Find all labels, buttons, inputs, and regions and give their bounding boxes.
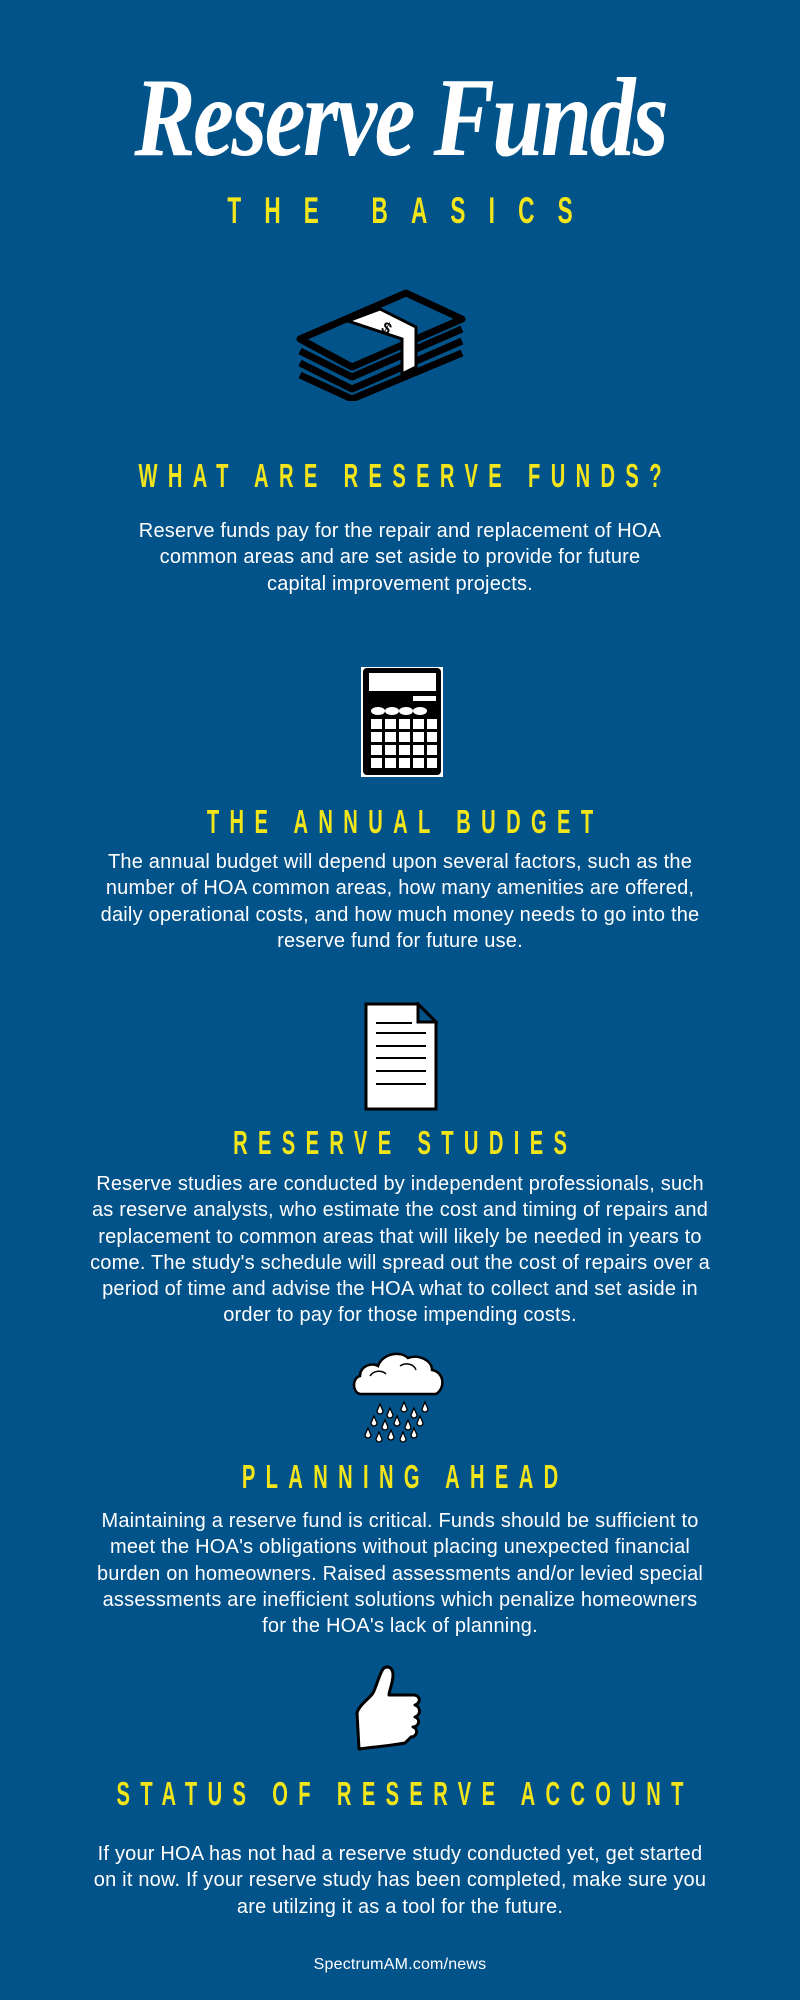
text: reserve studies: period of time and advise the HOA what to collect and set aside in	[102, 1278, 698, 1300]
footer: SpectrumAM.com/news	[314, 1956, 486, 1973]
heading: status of reserve account: STATUS OF RESERVE ACCOUNT	[117, 1775, 694, 1812]
text: planning ahead: burden on homeowners. Raised assessments and/or levied special	[97, 1563, 703, 1585]
icon: calculator	[361, 667, 443, 777]
text: annual budget	[101, 851, 699, 952]
heading: planning ahead: PLANNING AHEAD	[242, 1458, 569, 1495]
text: reserve studies: Reserve studies are conducted by independent professionals, such	[96, 1173, 704, 1195]
text: status of reserve account: are utilzing it as a tool for the future.	[237, 1896, 563, 1918]
text: annual budget: number of HOA common areas, how many amenities are offered,	[106, 877, 694, 899]
heading: the annual budget: THE ANNUAL BUDGET	[207, 803, 603, 840]
title: Reserve Funds	[134, 56, 666, 180]
text: planning ahead	[97, 1510, 703, 1637]
text: annual budget: The annual budget will depend upon several factors, such as the	[108, 851, 692, 873]
icon: rain cloud	[352, 1352, 444, 1443]
icon: thumbs up	[356, 1665, 421, 1750]
heading: reserve studies: RESERVE STUDIES	[233, 1124, 577, 1161]
text: reserve studies: as reserve analysts, who estimate the cost and timing of repairs and	[92, 1199, 708, 1221]
text: annual budget: reserve fund for future use.	[277, 930, 523, 952]
text: what are reserve funds: capital improvement projects.	[267, 573, 533, 595]
heading: what are reserve funds: WHAT ARE RESERVE FUNDS?	[138, 457, 672, 494]
text: planning ahead: Maintaining a reserve fund is critical. Funds should be sufficient to	[101, 1510, 699, 1532]
text: reserve studies: replacement to common areas that will likely be needed in years to	[98, 1226, 702, 1248]
text: planning ahead: assessments are inefficient solutions which penalize homeowners	[103, 1589, 697, 1611]
icon: document	[364, 1002, 438, 1110]
icon: money stack: $	[378, 319, 394, 338]
text: reserve studies: order to pay for those impending costs.	[223, 1304, 577, 1326]
text: planning ahead: for the HOA's lack of planning.	[262, 1615, 538, 1637]
subtitle: THE BASICS	[227, 190, 596, 231]
text: status of reserve account	[94, 1843, 706, 1918]
text: annual budget: daily operational costs, and how much money needs to go into the	[101, 904, 699, 926]
text: status of reserve account: If your HOA has not had a reserve study conducted yet, get started	[98, 1843, 702, 1865]
text: reserve studies	[90, 1173, 710, 1326]
text: what are reserve funds: Reserve funds pay for the repair and replacement of HOA	[139, 520, 661, 542]
text: status of reserve account: on it now. If your reserve study has been completed, make sure you	[94, 1869, 706, 1891]
text: what are reserve funds	[139, 520, 661, 595]
text: what are reserve funds: common areas and are set aside to provide for future	[160, 546, 640, 568]
text: reserve studies: come. The study's schedule will spread out the cost of repairs over a	[90, 1252, 710, 1274]
icon: money stack	[296, 290, 466, 401]
text: planning ahead: meet the HOA's obligations without placing unexpected financial	[110, 1536, 690, 1558]
